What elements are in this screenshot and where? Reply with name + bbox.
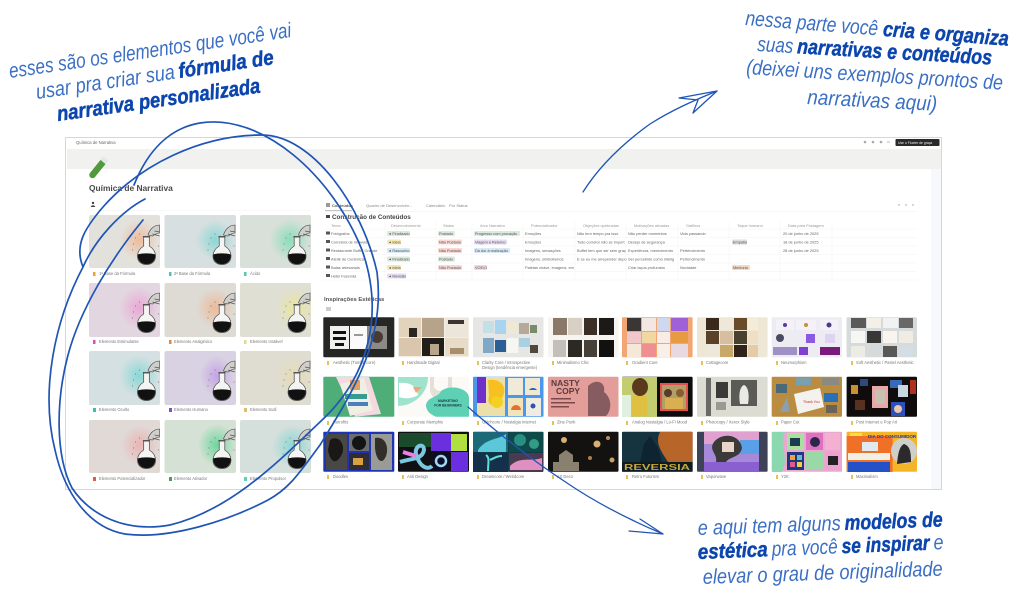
row: atelie: Pertencimento [680, 256, 705, 262]
row: restaurante: Não Postado [439, 249, 461, 253]
gallery labels: Gradient Core [632, 360, 658, 365]
scribble: loops around elements [49, 122, 378, 535]
row: restaurante: Imagens, sensações [525, 248, 561, 253]
row: restaurante: Restaurante Buffet Grande [331, 248, 377, 253]
row: atelie: Imagens, simbolismos [525, 256, 564, 262]
row: balas: Paletas chave, imagens, em [525, 265, 574, 270]
tabs [325, 203, 917, 211]
gallery labels: Anti Design [407, 474, 429, 479]
card: instavel: Elemento Instável [250, 339, 283, 344]
row: balas: Não Postado [439, 266, 461, 270]
tabs: Conteúdos [332, 203, 354, 208]
row: restaurante: Experiência, merecimento [628, 248, 673, 253]
tile: y2k [772, 432, 842, 472]
gallery labels: Minimalismo Chic [557, 360, 589, 365]
tile: corporate memphis: FOR BEGINNERS [434, 404, 463, 408]
card: potencializador: Elemento Potencializador [99, 476, 146, 481]
cover banner [67, 149, 941, 169]
table header row: Arco Narrativo [480, 223, 505, 228]
arrow: to content table [583, 91, 717, 192]
tile: paper cut [772, 377, 842, 417]
text: narratives note: nessa parte você [745, 7, 879, 40]
tile: neumorphism [772, 317, 842, 357]
tile: maximalism [847, 432, 917, 472]
table header row: Desenvolvimento [391, 223, 421, 228]
card: 2a base [164, 215, 236, 276]
card: 2a base: 2ª Base da Fórmula [174, 271, 211, 276]
gallery labels: Maximalism [856, 474, 878, 479]
text: elements note: fórmula de [177, 46, 275, 83]
top bar title: Química de Narrativa [76, 140, 116, 145]
tile: aesthetic [323, 317, 394, 357]
text: elements note: narrativa personalizada [55, 75, 262, 126]
row: fotografos: Vida passando [680, 231, 706, 236]
row: corretora: Emoções [525, 240, 541, 244]
gallery labels: Clarity Core / Introspective [482, 360, 531, 365]
card: acido [240, 215, 311, 276]
tile: clarity core [473, 317, 544, 357]
card: acido: Ácido [250, 271, 261, 276]
gallery labels: Paper Cut [781, 420, 800, 424]
tile: retro futurism: REVERSIA [624, 463, 690, 472]
card: humano [164, 351, 236, 412]
panel: notion page screenshot [66, 138, 942, 490]
gallery labels: Handmade Digital [407, 360, 440, 365]
gallery label icons [327, 361, 853, 479]
text: aesthetics note [697, 508, 944, 589]
row: balas: Mentoria [733, 266, 749, 270]
gallery labels: Corporate Memphis [407, 420, 443, 424]
text: elements note: esses são os elementos que você vai [7, 19, 294, 83]
row: hotel [326, 274, 406, 278]
text: narratives note: narrativas aqui) [807, 86, 938, 116]
tile: cottagecore [697, 317, 768, 357]
card: 1a base [89, 215, 160, 276]
gallery labels [333, 360, 914, 479]
table header row: Motivações ativadas [634, 223, 669, 228]
row: hotel: Hotel Fazenda [331, 274, 357, 278]
text: aesthetics note: pra você [770, 535, 838, 561]
table header row: Objeções quebradas [583, 223, 619, 228]
tile: zine punk: COPY [556, 386, 580, 396]
tile: corporate memphis: MARKETING [438, 399, 458, 403]
table header row [331, 223, 824, 228]
gallery labels: Soft Aesthetic / Pastel Aesthetic [856, 360, 914, 365]
row: fotografos: ● Finalizado [389, 232, 410, 236]
table: construcao de conteudos [323, 214, 917, 280]
text: elements note: usar pra criar sua [34, 61, 176, 104]
row: balas: Criar laços profundos [628, 265, 665, 270]
row: corretora: Empatia [733, 240, 748, 244]
right side strip [931, 169, 941, 489]
text: aesthetics note: se inspirar [841, 532, 932, 558]
row: fotografos: Progresso com provação [475, 232, 517, 236]
tile: minimalismo chic [548, 317, 618, 357]
gallery: aesthetic models [323, 317, 917, 472]
gallery labels: Y2K [781, 474, 789, 479]
text: aesthetics note: modelos de [844, 508, 943, 535]
page title: Química de Narrativa [89, 183, 173, 193]
text: elements note [7, 19, 294, 126]
card: sutil: Elemento Sutil [250, 407, 276, 412]
card: 1a base: 1ª Base da Fórmula [99, 271, 136, 276]
row: fotografos: Não perder momentos [628, 231, 667, 236]
table header row: Potencializador [531, 223, 558, 228]
tile: corporate memphis [398, 377, 469, 417]
table header row: Data para Postagem [788, 223, 824, 228]
row: balas: ● Ideia [389, 266, 401, 270]
card: propulsor: Elemento Propulsor [250, 476, 287, 481]
row: balas: Balas artesanais [331, 265, 360, 270]
row: restaurante: Da dor à realização [475, 249, 508, 253]
tile: dreamcore [473, 432, 544, 472]
tile: handmade [398, 317, 469, 357]
row: fotografos: 20 de junho de 2025 [783, 231, 818, 236]
button: use o fluxter [896, 139, 940, 146]
row: corretora [326, 240, 818, 244]
row: atelie: Postado [439, 258, 453, 262]
card: ativador [164, 420, 236, 481]
card: oculto: Elemento Oculto [99, 407, 130, 412]
row: balas: VOE/O [475, 266, 487, 270]
card: estimulante: Elemento Estimulante [99, 339, 140, 344]
text: narratives note: suas [757, 33, 794, 58]
card: ativador: Elemento Ativador [174, 476, 208, 481]
text: narratives note: narrativas e conteúdos [797, 35, 993, 70]
gallery labels: Doodles [333, 474, 348, 479]
tile: maximalism: DIA DO CONSUMIDOR [868, 434, 917, 439]
row: corretora: Corretora de Imóveis [331, 240, 367, 244]
text: narratives note [745, 7, 1010, 116]
row: corretora: Desejo de segurança [628, 240, 666, 244]
gallery labels: Retrofits [333, 420, 348, 424]
row: restaurante [326, 248, 818, 253]
grid lines [323, 222, 917, 280]
text: aesthetics note: elevar o grau de originalidade [702, 558, 943, 589]
tile: anti design [398, 432, 469, 472]
tile: post internet pop art [847, 377, 917, 417]
row: restaurante: ● Rascunho [389, 249, 409, 253]
row: corretora: ● Ideia [389, 240, 401, 244]
tile: zine punk: NASTY [551, 378, 580, 388]
gallery labels: Photocopy / Xerox Style [706, 420, 750, 424]
row: corretora: 18 de junho de 2025 [783, 240, 818, 244]
tile: retrofits [323, 377, 394, 417]
gallery labels: Aesthetic (Tumblr core) [333, 360, 376, 365]
row: fotografos [326, 231, 818, 236]
card: oculto [89, 351, 160, 412]
table header row: Toque humano [737, 223, 763, 228]
gallery labels: Glitchcore / Nostalgia Internet [482, 420, 537, 424]
card: analgesico [164, 283, 236, 344]
tile: soft aesthetic [847, 317, 917, 357]
tile: art deco [548, 432, 618, 472]
gallery labels: Neumorphism [781, 360, 807, 365]
gallery labels: Art Deco [557, 474, 574, 479]
icon: test tube [92, 158, 106, 175]
text: aesthetics note: e [933, 531, 944, 555]
tabs: Calendário [426, 203, 446, 208]
card: analgesico: Elemento Analgésico [174, 339, 213, 344]
card: potencializador [89, 420, 160, 481]
row: corretora: Não Postado [439, 240, 461, 244]
tile: gradient core [622, 317, 693, 357]
tile: paper cut: Thank You [803, 400, 820, 404]
row: corretora: Viagem e Retorno [475, 240, 506, 244]
row: atelie: Ateliê de Cerâmica [331, 256, 365, 262]
row: atelie: Ser percebido como intelig [628, 256, 674, 262]
row: restaurante: Pertencimento [680, 248, 705, 253]
gallery labels: Dreamcore / Weirdcore [482, 474, 525, 479]
row: corretora: Todo corretor não se import [577, 240, 625, 244]
gallery labels: Post Internet e Pop Art [856, 420, 898, 424]
gallery labels: Retro Futurism [632, 474, 660, 479]
card: propulsor [240, 420, 314, 481]
text: aesthetics note: estética [697, 538, 768, 564]
tile: retro futurism [622, 432, 693, 472]
row: fotografos: Não tem tempo pra isso [577, 231, 618, 236]
row: balas: Novidade [680, 265, 696, 270]
button: use o fluxter: Use o Fluxter de graça [898, 141, 932, 145]
arrow: to aesthetic models [468, 407, 663, 534]
row: atelie: ● Finalizado [389, 258, 410, 262]
tabs: Quadro de Desenvolvim... [366, 203, 412, 208]
heading: inspiracoes esteticas: Inspirações Estéticas [324, 297, 385, 303]
card: instavel [240, 283, 314, 344]
text: aesthetics note: e aqui tem alguns [697, 512, 842, 540]
tile: glitchcore [473, 377, 544, 417]
row: fotografos: Fotógrafos [331, 231, 350, 236]
row: restaurante: Buffet tem que ser sem graç [577, 248, 626, 253]
gallery labels: Design (tendência emergente) [482, 365, 538, 370]
gallery labels: Analog Nostalgia / Lo-Fi Mood [632, 420, 688, 424]
gallery labels: Cottagecore [706, 360, 729, 365]
table header row: Gatilhos [686, 223, 700, 228]
row: fotografos: Postado [439, 232, 453, 236]
card: sutil [240, 351, 314, 412]
panel: formula element cards [89, 215, 314, 481]
gallery labels: Zine Punk [557, 420, 576, 424]
tile: analog nostalgia [622, 377, 693, 417]
card: humano: Elemento Humano [174, 407, 209, 412]
tabs: Por Status [449, 203, 468, 208]
gallery labels: Vaporwave [706, 474, 727, 479]
tile: doodles [323, 432, 394, 472]
tile: vaporwave [697, 432, 768, 472]
tile: zine punk [548, 377, 618, 417]
top bar icons [864, 141, 890, 143]
row: atelie [326, 256, 705, 262]
card: estimulante [89, 283, 160, 344]
view icon [326, 307, 331, 311]
table header row: Tema [331, 223, 341, 228]
row: atelie: E se eu me arrepender depo [577, 256, 627, 262]
row: hotel: ● Revisão [389, 274, 406, 278]
row: restaurante: 28 de junho de 2025 [783, 248, 818, 253]
table heading: Construção de Conteúdos [332, 214, 411, 221]
row: fotografos: Emoções [525, 231, 541, 236]
table header row: Status [443, 223, 454, 228]
tile: photocopy [697, 377, 768, 417]
icon: person [91, 202, 95, 207]
row: balas [326, 265, 750, 270]
